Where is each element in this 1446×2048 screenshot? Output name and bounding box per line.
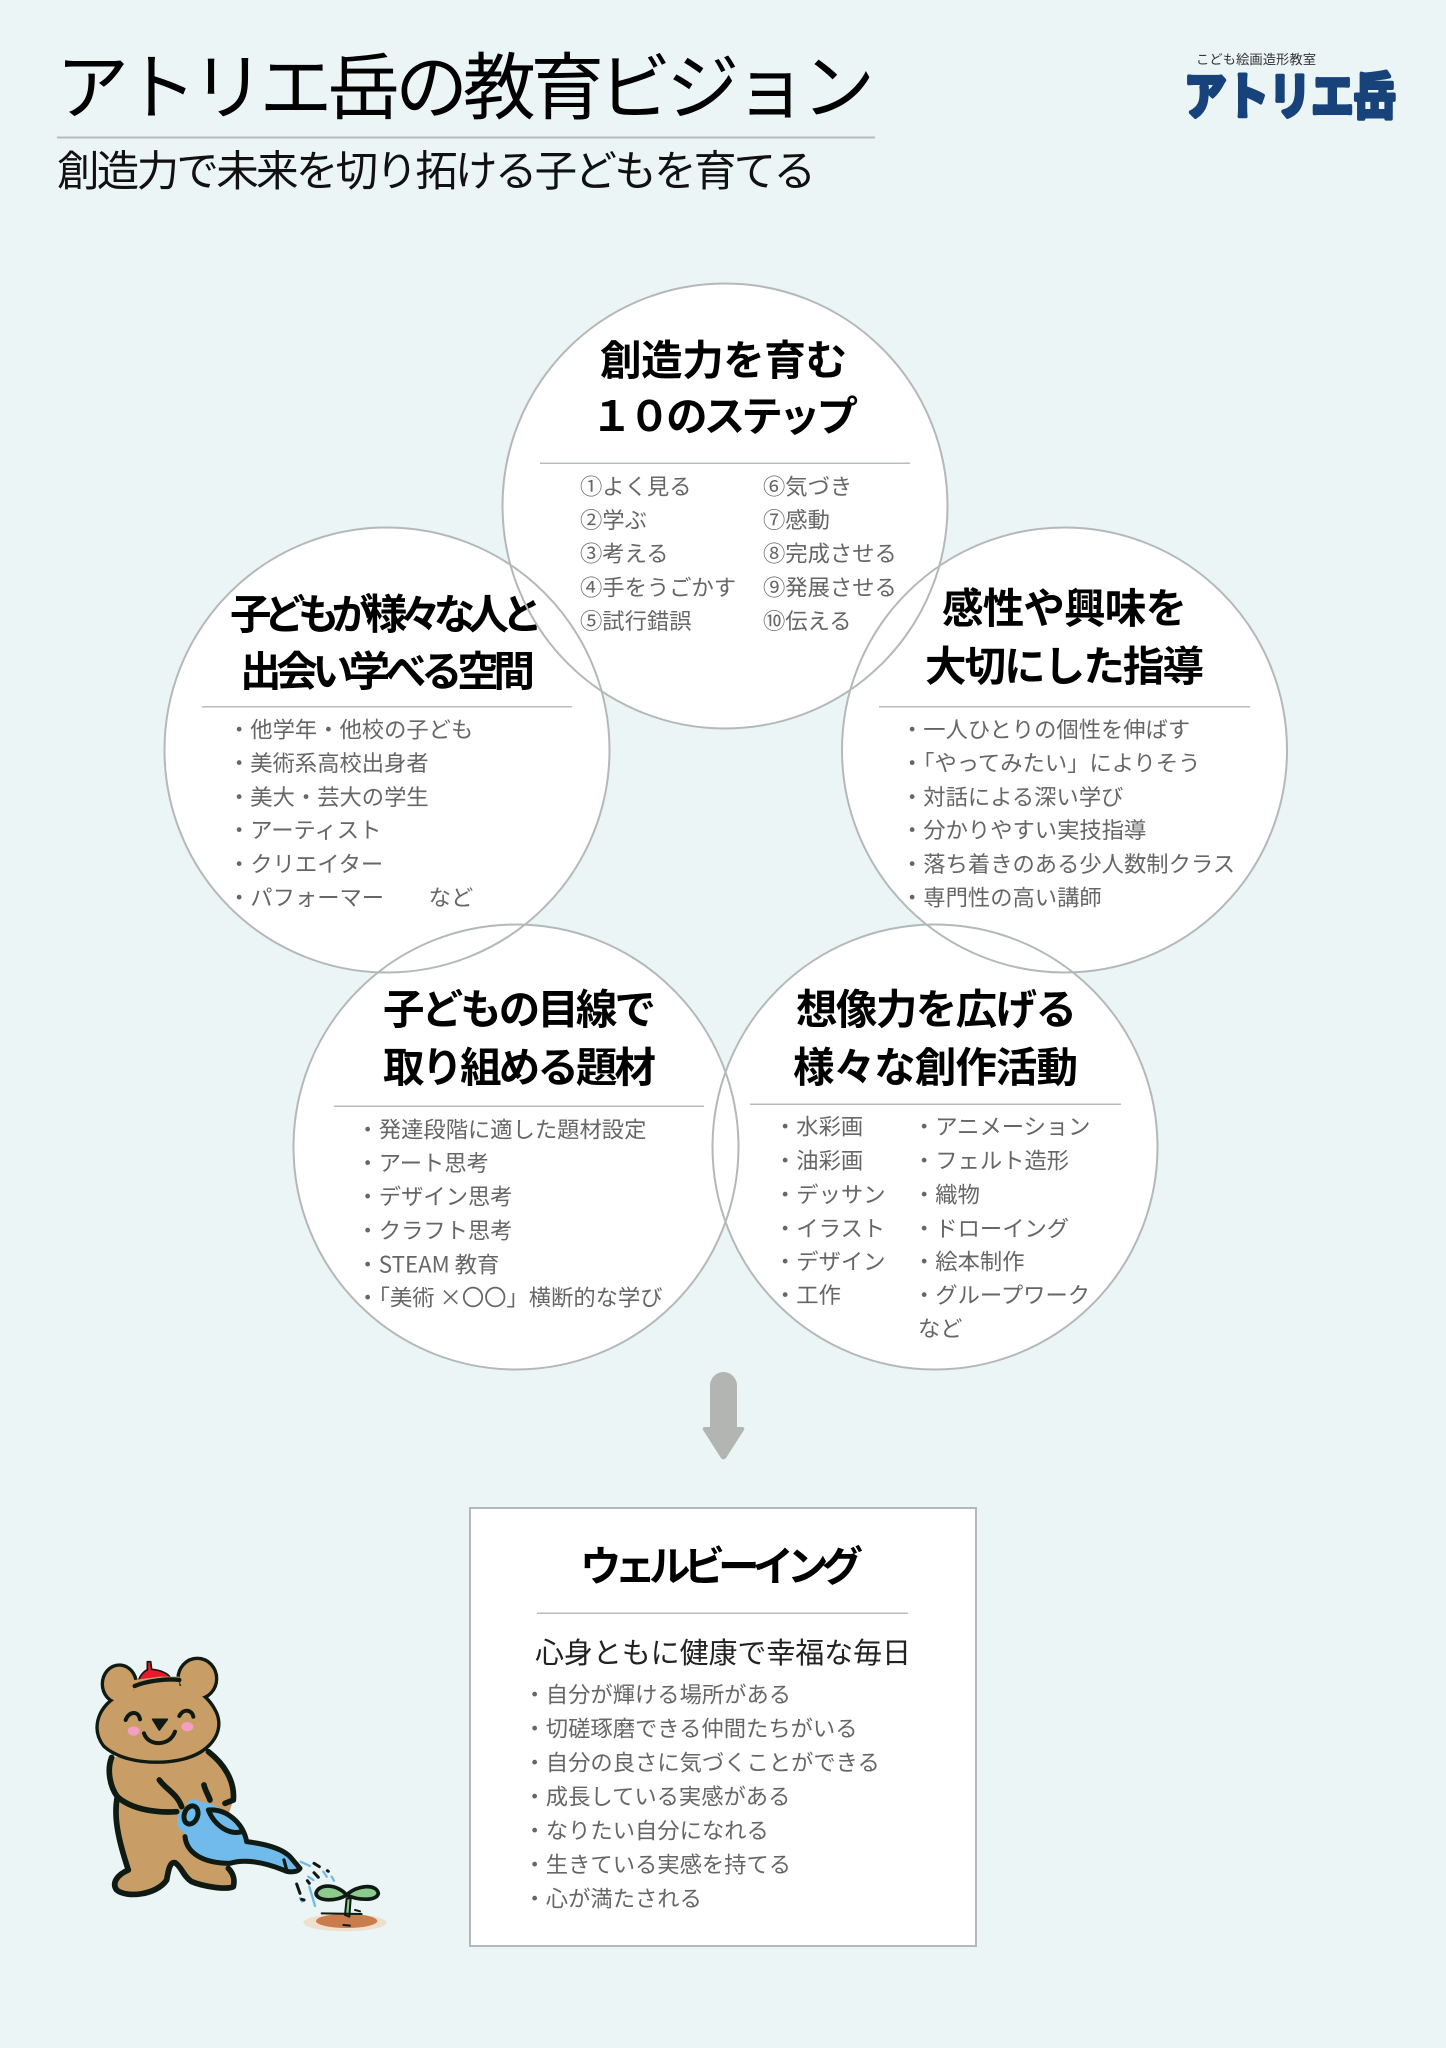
- panel: space to meet people: ・クリエイター: [228, 847, 383, 879]
- subtitle: 創造力で未来を切り拓ける子どもを育てる: [57, 138, 816, 199]
- panel: 10 steps for creativity: １０のステップ: [591, 383, 858, 443]
- panel: subject matter at child's eye level: [334, 976, 704, 1312]
- arrow: [703, 1372, 744, 1459]
- panel: well-being: ・なりたい自分になれる: [524, 1814, 769, 1846]
- panel: various creative activities: ・アニメーション: [913, 1110, 1090, 1142]
- circle outlines: [164, 284, 1287, 1370]
- panel: well-being: ・自分が輝ける場所がある: [524, 1678, 791, 1710]
- panel: 10 steps for creativity: ⑥気づき: [763, 470, 852, 502]
- panel: various creative activities: ・グループワーク: [913, 1278, 1090, 1310]
- panel: 10 steps for creativity: ⑧完成させる: [763, 536, 897, 568]
- panel: well-being: ・自分の良さに気づくことができる: [524, 1746, 880, 1778]
- panel: subject matter at child's eye level: ・アート思考: [356, 1146, 489, 1178]
- panel: various creative activities: [750, 976, 1121, 1344]
- panel: well-being: [470, 1508, 976, 1946]
- panel: guidance valuing sensitivity: ・落ち着きのある少人数制クラス: [901, 847, 1235, 879]
- logo: こども絵画造形教室: [1196, 49, 1316, 68]
- panel: 10 steps for creativity: ⑦感動: [763, 503, 830, 535]
- panel: guidance valuing sensitivity: 大切にした指導: [925, 633, 1204, 693]
- panel: various creative activities: ・フェルト造形: [913, 1144, 1069, 1176]
- panel: 10 steps for creativity: ④手をうごかす: [580, 570, 736, 602]
- title: アトリエ岳の教育ビジョン: [56, 29, 875, 135]
- panel: various creative activities: 様々な創作活動: [793, 1034, 1078, 1094]
- panel: various creative activities: ・工作: [774, 1278, 841, 1310]
- panel: subject matter at child's eye level: ・STEAM 教育: [356, 1248, 499, 1280]
- panel: guidance valuing sensitivity: ・対話による深い学び: [901, 780, 1123, 812]
- panel: space to meet people: ・他学年・他校の子ども: [228, 712, 473, 744]
- panel: subject matter at child's eye level: ・クラフト思考: [356, 1214, 513, 1246]
- panel: well-being: ウェルビーイング: [580, 1533, 863, 1593]
- circle fills: [164, 284, 1287, 1370]
- panel: 10 steps for creativity: ①よく見る: [580, 470, 692, 502]
- panel: subject matter at child's eye level: 取り組める題材: [383, 1034, 656, 1094]
- panel: subject matter at child's eye level: 子どもの目線で: [383, 976, 656, 1036]
- panel: well-being: ・切磋琢磨できる仲間たちがいる: [524, 1712, 858, 1744]
- panel: various creative activities: ・油彩画: [774, 1144, 863, 1176]
- panel: guidance valuing sensitivity: ・「やってみたい」によりそう: [901, 746, 1200, 778]
- panel: subject matter at child's eye level: ・「美術 ×〇〇」横断的な学び: [356, 1280, 663, 1312]
- logo: アトリエ岳: [1184, 57, 1396, 129]
- panel: various creative activities: ・絵本制作: [913, 1244, 1024, 1276]
- panel: guidance valuing sensitivity: [879, 575, 1250, 912]
- panel: space to meet people: ・美術系高校出身者: [228, 746, 429, 778]
- panel: 10 steps for creativity: ⑤試行錯誤: [580, 604, 692, 636]
- icon: bear watering a seedling: [99, 1660, 387, 1931]
- panel: well-being: 心身ともに健康で幸福な毎日: [535, 1630, 911, 1672]
- panel: various creative activities: ・織物: [913, 1178, 980, 1210]
- panel: 10 steps for creativity: ②学ぶ: [580, 503, 647, 535]
- panel: space to meet people: 子どもが様々な人と: [230, 581, 543, 641]
- panel: space to meet people: ・アーティスト: [228, 813, 381, 845]
- panel: 10 steps for creativity: ⑩伝える: [763, 604, 852, 636]
- panel: 10 steps for creativity: [540, 327, 910, 636]
- panel: space to meet people: ・パフォーマー など: [228, 880, 473, 912]
- panel: 10 steps for creativity: ③考える: [580, 536, 669, 568]
- panel: various creative activities: ・デッサン: [774, 1178, 886, 1210]
- panel: various creative activities: ・水彩画: [774, 1110, 863, 1142]
- panel: space to meet people: 出会い学べる空間: [240, 638, 535, 698]
- panel: various creative activities: など: [918, 1312, 963, 1344]
- panel: various creative activities: ・ドローイング: [913, 1212, 1069, 1244]
- panel: guidance valuing sensitivity: ・分かりやすい実技指導: [901, 813, 1146, 845]
- panel: space to meet people: ・美大・芸大の学生: [228, 780, 429, 812]
- panel: guidance valuing sensitivity: ・専門性の高い講師: [901, 880, 1102, 912]
- panel: 10 steps for creativity: 創造力を育む: [600, 327, 847, 387]
- panel: guidance valuing sensitivity: 感性や興味を: [942, 575, 1187, 635]
- panel: guidance valuing sensitivity: ・一人ひとりの個性を伸ばす: [901, 712, 1190, 744]
- panel: various creative activities: ・イラスト: [774, 1212, 885, 1244]
- panel: well-being: ・心が満たされる: [524, 1882, 702, 1914]
- panel: subject matter at child's eye level: ・発達段階に適した題材設定: [356, 1112, 646, 1144]
- panel: 10 steps for creativity: ⑨発展させる: [763, 570, 897, 602]
- panel: various creative activities: 想像力を広げる: [796, 976, 1077, 1036]
- panel: space to meet people: [202, 581, 572, 912]
- panel: subject matter at child's eye level: ・デザイン思考: [356, 1180, 513, 1212]
- panel: various creative activities: ・デザイン: [774, 1244, 886, 1276]
- panel: well-being: ・生きている実感を持てる: [524, 1848, 791, 1880]
- panel: well-being: ・成長している実感がある: [524, 1780, 790, 1812]
